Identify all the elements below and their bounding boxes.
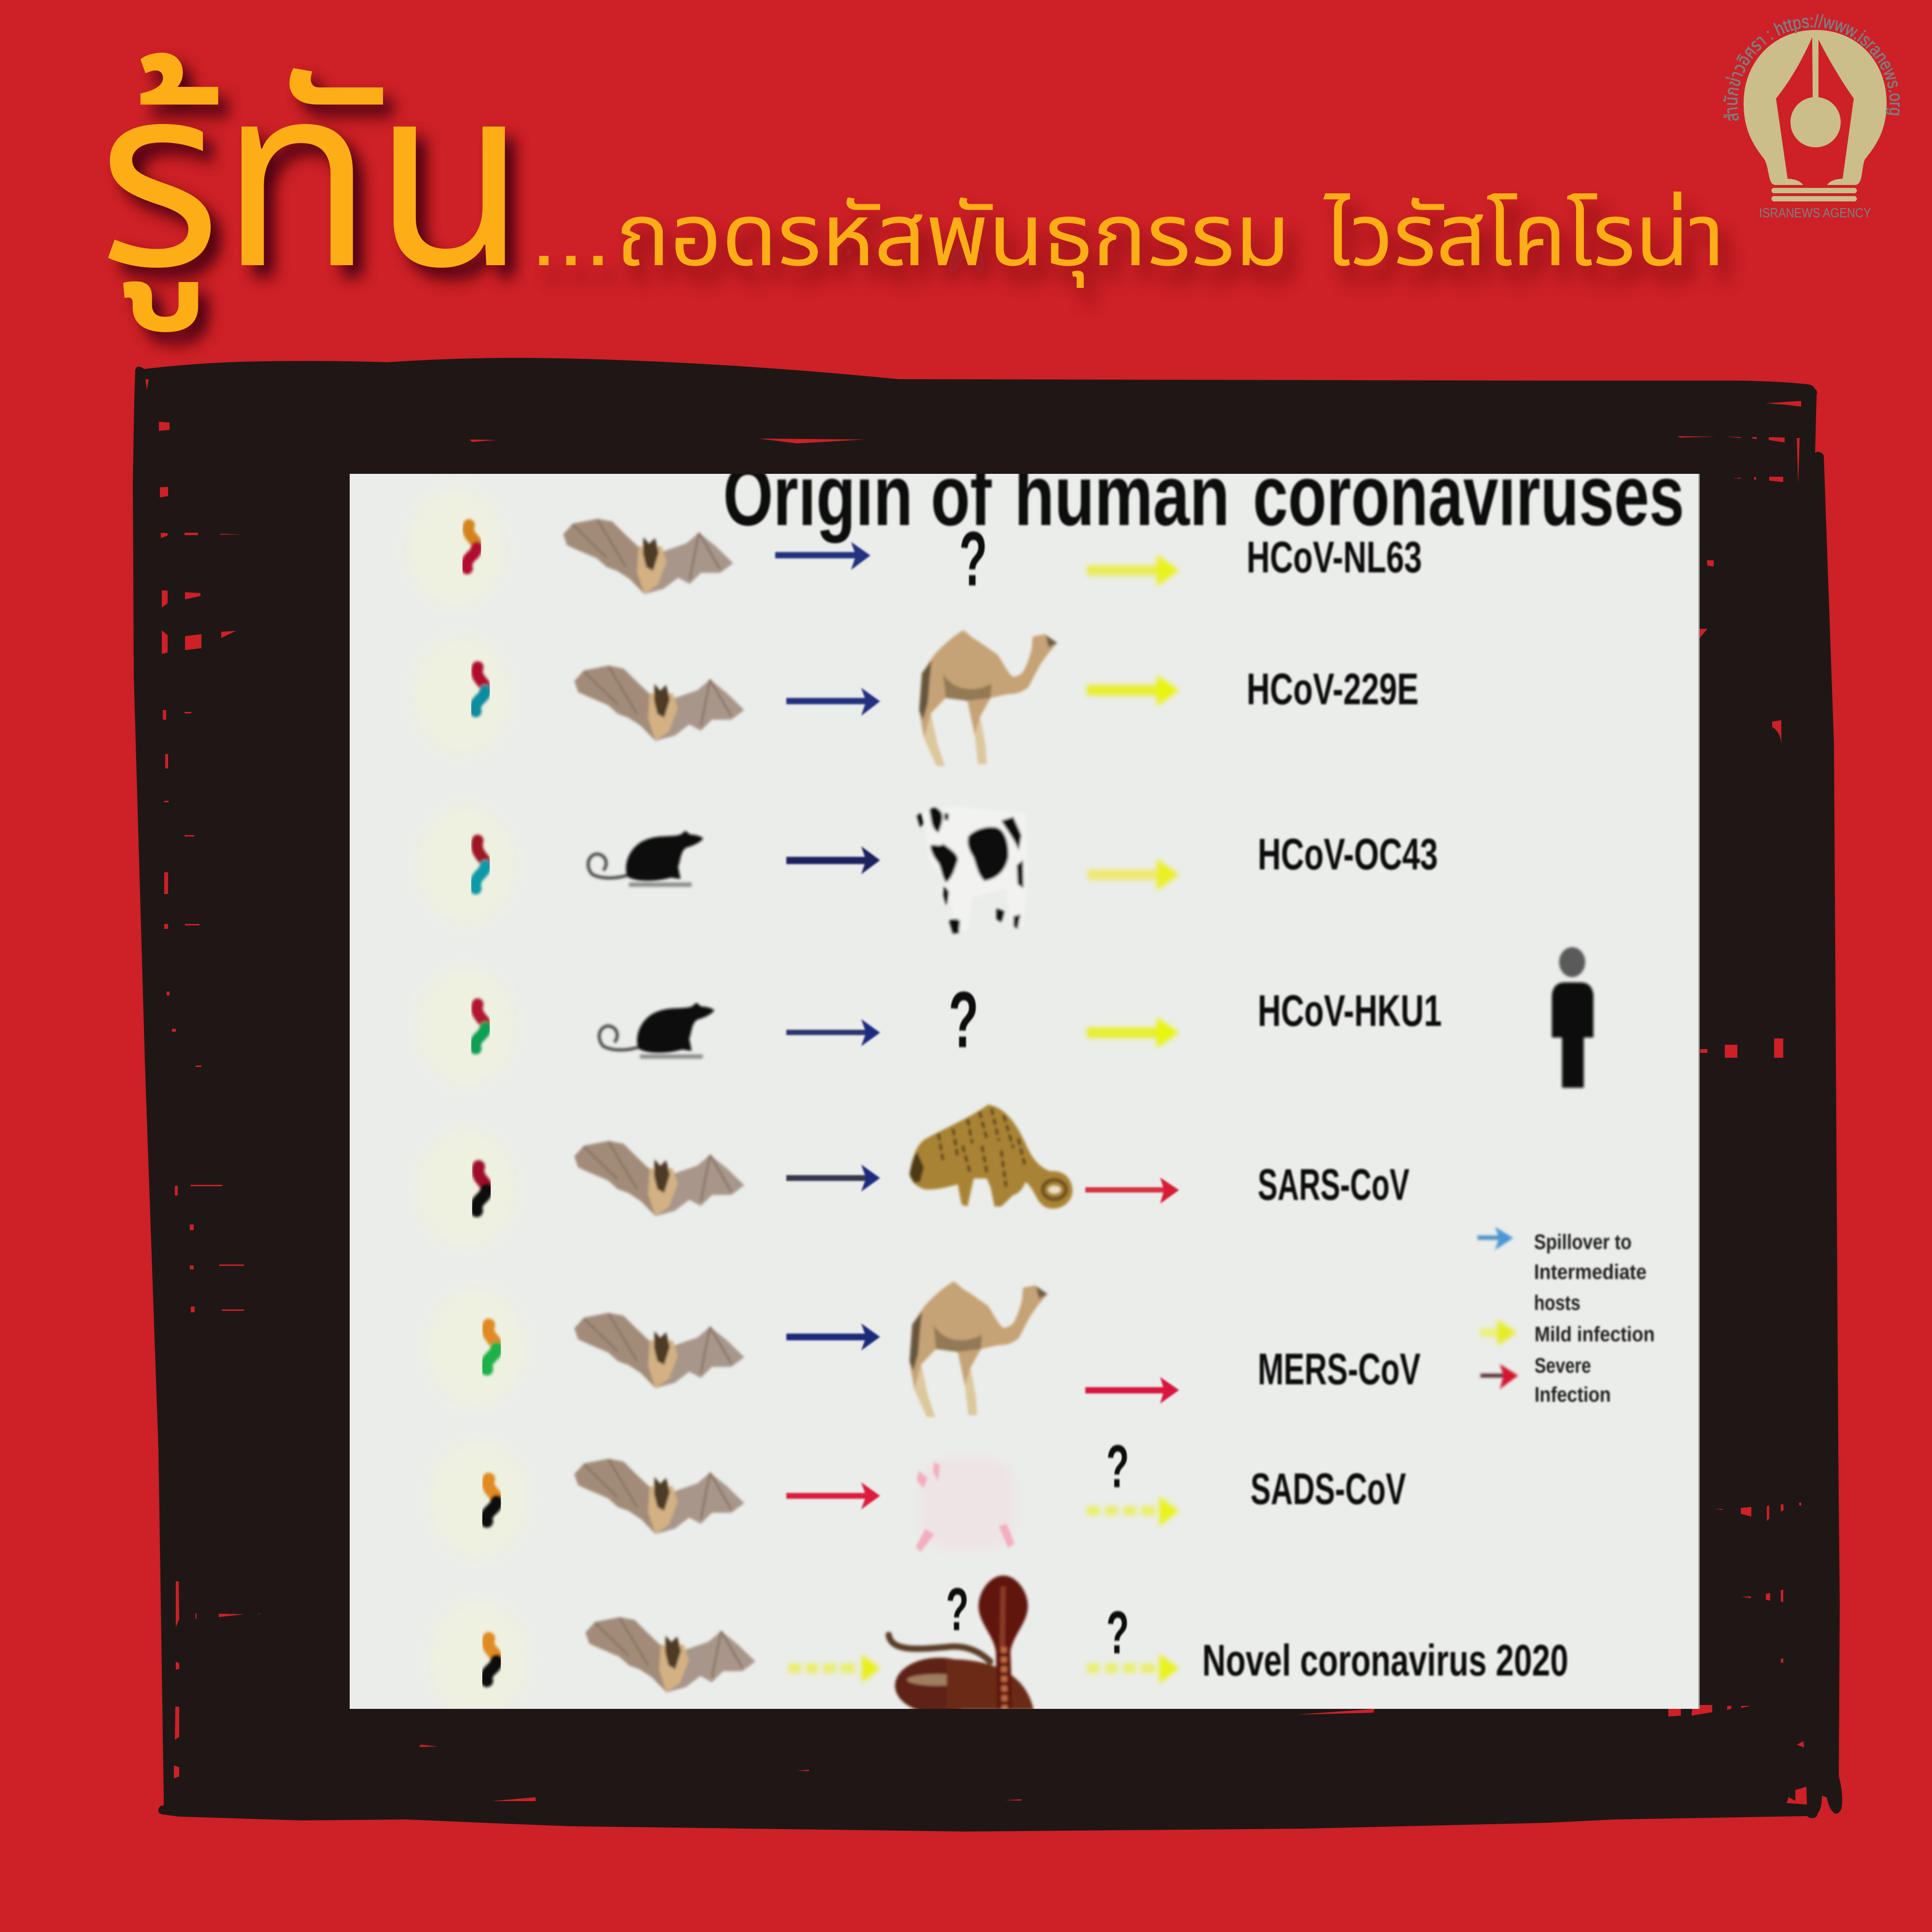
label: Novel coronavirus 2020: Novel coronavirus 2020 <box>1202 1636 1568 1685</box>
legend arrow: severe <box>1480 1364 1518 1389</box>
icon: camel row 2 <box>919 630 1057 766</box>
arrow: row 1 yellow <box>1087 554 1179 586</box>
logo: Isranews Agency <box>1723 14 1900 220</box>
icon: cow row 3 <box>917 806 1028 934</box>
red gaps in scribble <box>145 379 1807 1804</box>
halos behind virus icons <box>412 496 522 1709</box>
slide title: human <box>1014 447 1230 543</box>
arrow: row 5 dark <box>786 1165 880 1192</box>
label: HCoV-229E: HCoV-229E <box>1247 665 1419 714</box>
label: MERS-CoV: MERS-CoV <box>1258 1345 1421 1394</box>
icon: bat row 8 <box>585 1617 755 1692</box>
legend text: spillover: hosts <box>1534 1291 1580 1315</box>
slide title: Origin of <box>723 447 992 543</box>
icon: bat row 6 <box>574 1313 744 1388</box>
title: subtitle: ถอดรหัสพันธุกรรม <box>616 186 1290 288</box>
title: main word: รู้ทัน <box>98 37 527 332</box>
icon: virus genome row 8 <box>486 1638 497 1681</box>
arrow: row 5 red <box>1085 1178 1179 1204</box>
title: subtitle: ไวรัสโคโรน่า <box>1323 186 1725 284</box>
label: HCoV-OC43: HCoV-OC43 <box>1258 830 1438 879</box>
icon: bat row 7 <box>574 1459 744 1534</box>
legend text: severe: Severe <box>1534 1354 1591 1378</box>
label: SADS-CoV: SADS-CoV <box>1250 1464 1406 1514</box>
icon: human figure <box>1552 947 1593 1088</box>
text: question mark at cobra: ? <box>946 1576 969 1644</box>
title: subtitle: ไวรัสโคโรน่า <box>1333 202 1734 299</box>
arrow: row 6 blue <box>786 1323 880 1350</box>
legend text: mild: Mild infection <box>1534 1322 1655 1346</box>
arrow: row 1 blue <box>775 542 870 570</box>
logo wordmark: ISRANEWS AGENCY <box>1759 205 1871 220</box>
legend arrow: spillover <box>1477 1227 1513 1250</box>
title: main word: รู้ทัน <box>109 48 538 344</box>
arrow: row 4 yellow <box>1087 1017 1179 1048</box>
icon: civet row 5 <box>909 1105 1072 1208</box>
arrow: row 8 yellow dashed <box>1087 1654 1179 1684</box>
legend <box>1477 1227 1655 1406</box>
icon: bat row 2 <box>574 666 744 741</box>
icon: virus genome row 2 <box>475 667 485 711</box>
legend arrow: mild <box>1480 1320 1517 1346</box>
icon: rat row 4 <box>599 1003 714 1059</box>
black scribbled frame <box>133 358 1842 1832</box>
title: subtitle <box>530 186 1734 303</box>
arrow: row 7 yellow dashed <box>1087 1496 1179 1526</box>
icon: bat row 1 <box>563 519 733 594</box>
icon: virus genome row 5 <box>476 1166 486 1211</box>
title: subtitle: ... <box>540 202 621 299</box>
icon: virus genome row 6 <box>486 1325 497 1369</box>
icon: virus genome row 4 <box>475 1004 485 1049</box>
label: HCoV-HKU1: HCoV-HKU1 <box>1258 986 1442 1036</box>
icon: virus genome row 7 <box>486 1479 497 1521</box>
icon: cobra row 8 <box>889 1576 1034 1714</box>
label: SARS-CoV: SARS-CoV <box>1258 1160 1409 1209</box>
slide title <box>723 447 1684 543</box>
arrow: row 2 yellow <box>1087 675 1179 706</box>
icon: rat row 3 <box>588 831 703 887</box>
title: subtitle: ถอดรหัสพันธุกรรม <box>625 202 1300 303</box>
icon: camel row 6 <box>909 1281 1048 1417</box>
legend text: severe <box>1534 1354 1611 1406</box>
text: question mark row 8: ? <box>1106 1599 1129 1667</box>
label: HCoV-NL63: HCoV-NL63 <box>1247 533 1422 582</box>
text: question mark row 4: ? <box>949 976 979 1065</box>
arrow: row 2 blue <box>786 688 880 716</box>
icon: virus genome row 3 <box>475 840 485 889</box>
text: question mark row 1: ? <box>959 516 987 602</box>
arrow: row 7 red <box>786 1482 880 1509</box>
logo curved text: สำนักข่าวอิศรา : https://www.isranews.org <box>1723 14 1900 121</box>
icon: pen nib bulb <box>1744 30 1887 185</box>
slide title: coronaviruses <box>1253 447 1684 543</box>
text: question mark row 7: ? <box>1106 1433 1129 1501</box>
legend text: spillover: Spillover to <box>1534 1230 1632 1254</box>
icon: virus genome row 1 <box>467 525 477 568</box>
icon: bat row 5 <box>574 1141 744 1216</box>
arrow: row 3 yellow <box>1088 859 1179 891</box>
legend text: spillover: Intermediate <box>1534 1260 1647 1284</box>
panel: slide photo <box>350 447 1700 1720</box>
arrow: row 4 blue <box>786 1019 880 1046</box>
arrow: row 8 yellow dashed <box>788 1655 880 1683</box>
legend text: spillover <box>1534 1230 1647 1315</box>
icon: pig row 7 <box>916 1458 1015 1552</box>
arrow: row 3 dark blue <box>786 846 880 874</box>
title: subtitle: ... <box>530 186 611 284</box>
logo base bars <box>1772 188 1857 201</box>
slide background <box>350 474 1700 1709</box>
legend text: severe: Infection <box>1534 1383 1611 1406</box>
arrow: row 6 red <box>1085 1377 1179 1404</box>
